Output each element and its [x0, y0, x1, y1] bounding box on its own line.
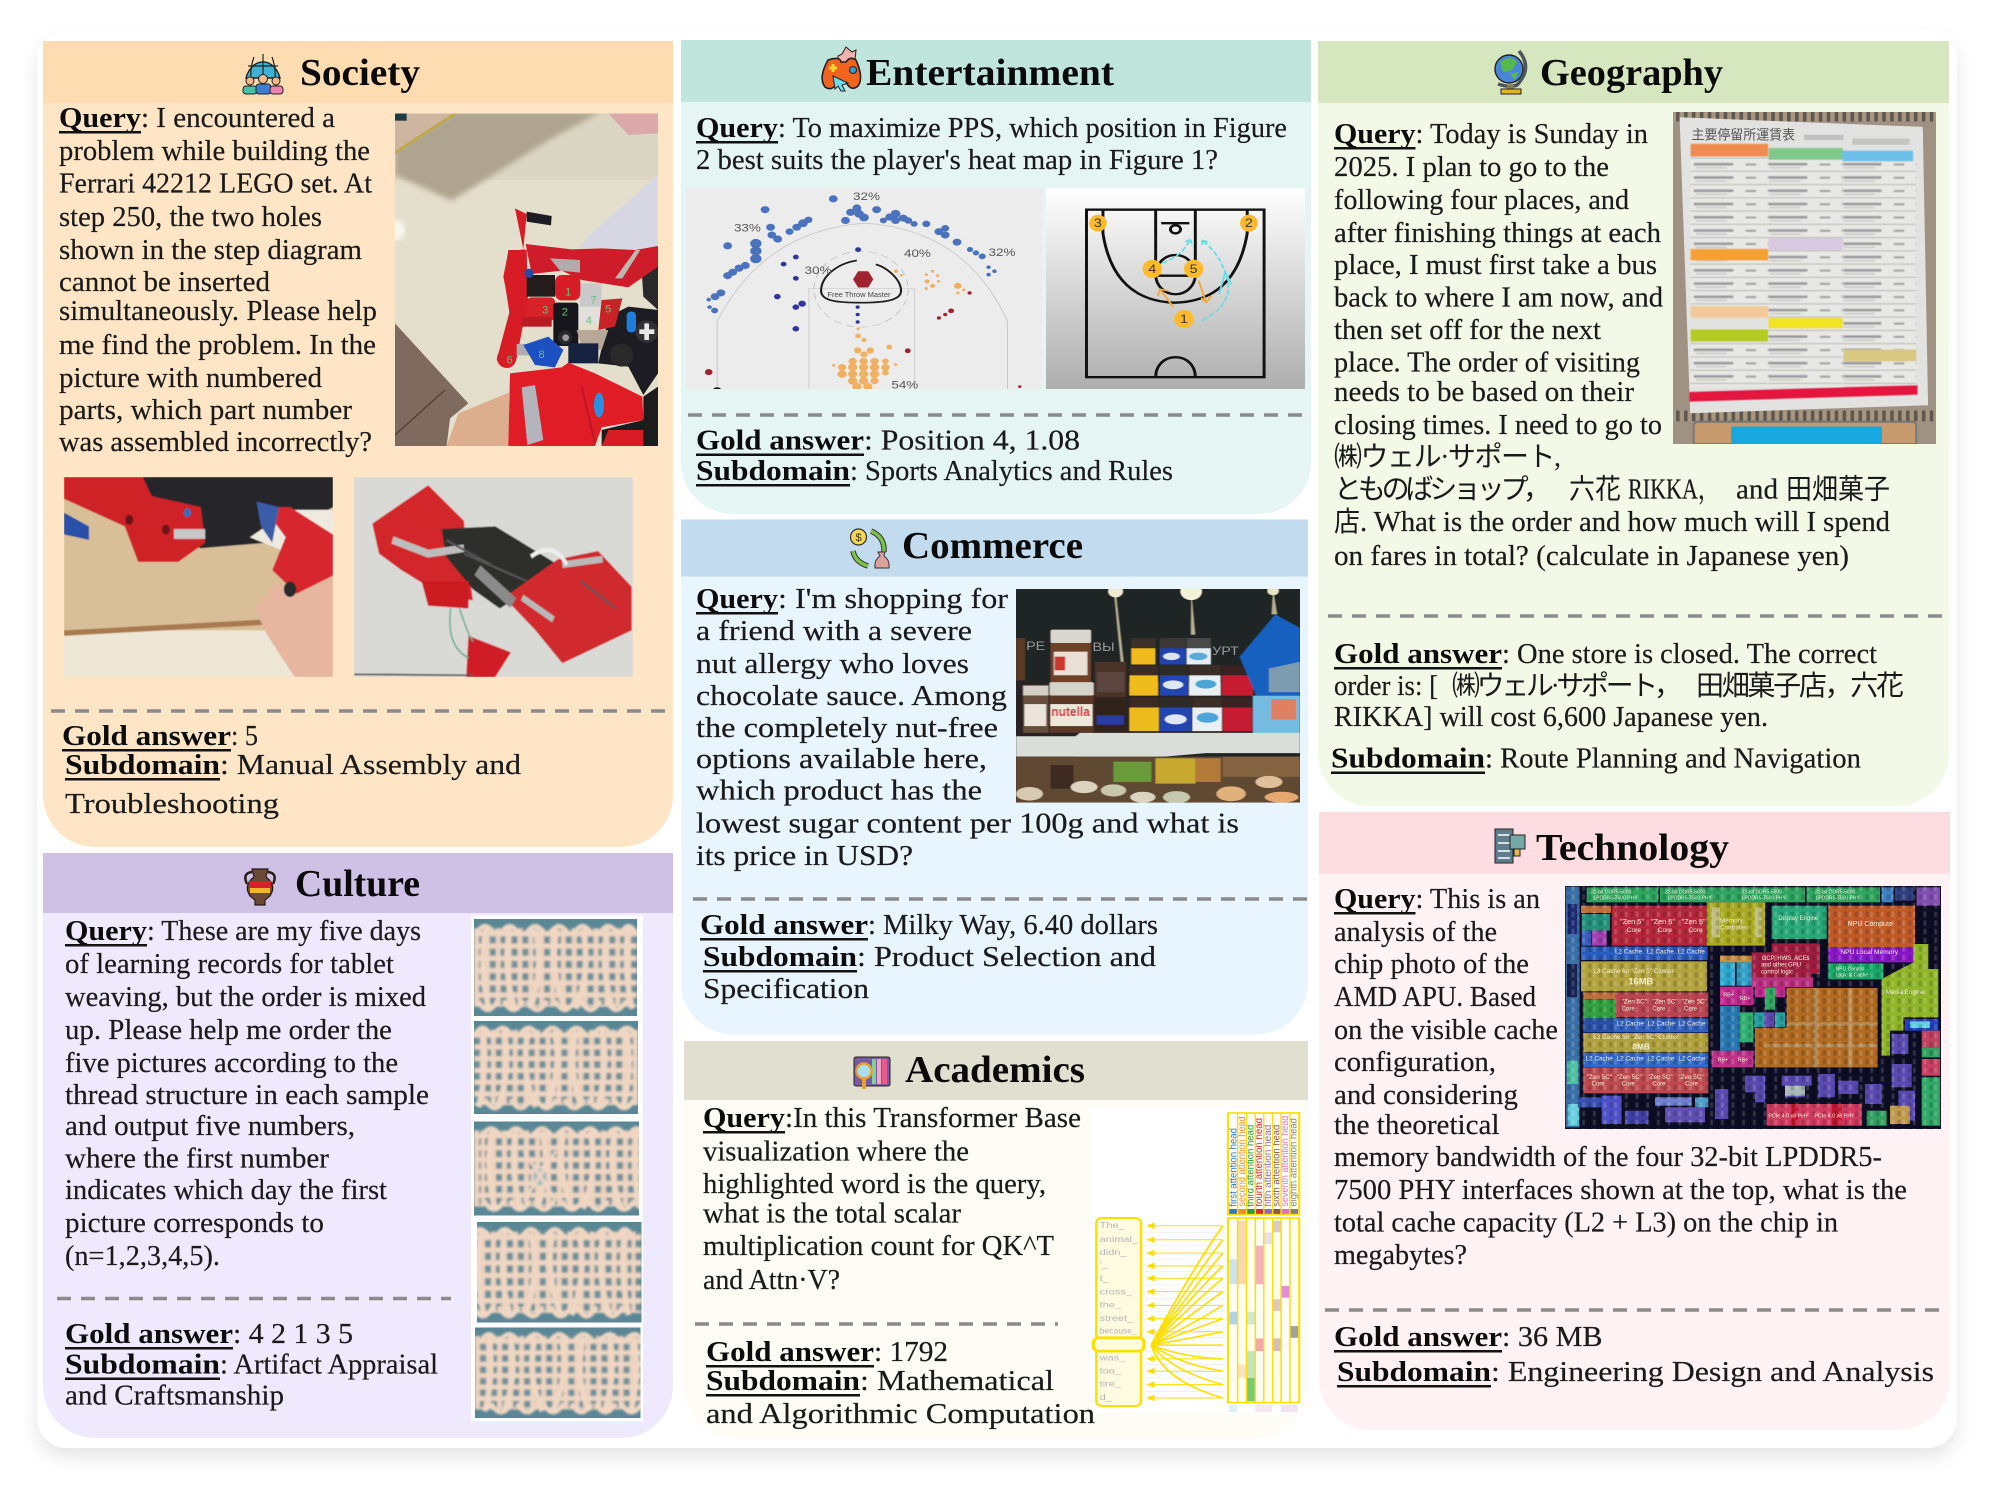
photo: bus fare table: 主要停留所運賃表	[1692, 123, 1795, 144]
query text: 六花	[1569, 474, 1621, 506]
query text	[1334, 119, 1890, 572]
query text: the theoretical	[1334, 1110, 1500, 1141]
diagram: attention visualization: second attention head	[1236, 1116, 1247, 1207]
diagram: attention visualization: first attention head	[1227, 1128, 1239, 1207]
query text: Query	[696, 584, 778, 615]
query text: chocolate sauce. Among	[696, 681, 1007, 712]
diagram: attention visualization: d_	[1100, 1393, 1112, 1403]
query text: nut allergy who loves	[696, 649, 969, 680]
query text: thread structure in each sample	[65, 1080, 429, 1111]
query text: lowest sugar content per 100g and what is	[696, 809, 1239, 840]
photo: AMD APU chip die: "Zen 5C"	[1682, 998, 1707, 1005]
photo: AMD APU chip die: Core	[1685, 1082, 1699, 1088]
gold answer and subdomain	[700, 910, 1158, 1005]
gold answer and subdomain: : 36 MB	[1502, 1322, 1602, 1353]
photo: numbered LEGO parts: 2	[562, 307, 568, 319]
photo: AMD APU chip die: Core	[1684, 1007, 1698, 1013]
query text: needs to be based on their	[1334, 377, 1635, 408]
query text: multiplication count for QK^T	[703, 1231, 1054, 1262]
query text: five pictures according to the	[65, 1048, 398, 1079]
gold answer and subdomain: Gold answer	[700, 910, 868, 941]
query text: :In this Transformer Base	[785, 1103, 1081, 1134]
query text: what is the total scalar	[703, 1199, 962, 1230]
gold answer and subdomain: : 5	[231, 721, 258, 752]
photo: AMD APU chip die: Logic & Cache	[1836, 973, 1868, 979]
photo: AMD APU chip die: 32-bit DDR5-5600	[1665, 889, 1706, 895]
photo: AMD APU chip die: RB+	[1718, 1057, 1728, 1063]
gold answer and subdomain: : Position 4, 1.08	[864, 426, 1080, 456]
heading: commerce: Commerce	[902, 525, 1083, 567]
gold answer and subdomain: Subdomain	[703, 942, 857, 973]
query text: AMD APU. Based	[1334, 982, 1536, 1013]
photo: numbered LEGO parts: 7	[590, 294, 597, 306]
photo: AMD APU chip die: Media Engine	[1886, 989, 1925, 996]
photo: AMD APU chip die: L2 Cache	[1647, 1056, 1675, 1063]
query text	[696, 113, 1287, 176]
gold answer and subdomain: 田畑菓子店，六花	[1696, 670, 1904, 702]
diagram: attention visualization: animal_	[1100, 1235, 1139, 1244]
photo: AMD APU chip die: "Zen 5C"	[1652, 998, 1678, 1005]
photo: chocolate spread shelf: УРТ	[1212, 644, 1239, 658]
gold answer and subdomain: and Algorithmic Computation	[706, 1399, 1095, 1430]
photo: AMD APU chip die: Core	[1652, 1007, 1666, 1013]
query text: : I'm shopping for	[778, 584, 1009, 615]
photo: AMD APU chip die: L2 Cache	[1615, 948, 1643, 955]
chart: basketball court positions	[1046, 188, 1305, 389]
photo: AMD APU chip die: LPDDR5-7500 PHY	[1668, 895, 1713, 901]
query text: simultaneously. Please help	[59, 296, 377, 327]
query text: following four places, and	[1334, 185, 1629, 216]
photo: AMD APU chip die: 16MB	[1628, 977, 1653, 987]
query text: parts, which part number	[59, 395, 353, 426]
query text: Query	[65, 916, 147, 947]
diagram: attention visualization: street_	[1100, 1314, 1134, 1324]
query text: 店	[1334, 507, 1360, 538]
heading: society: Society	[300, 52, 420, 94]
photo: AMD APU chip die: L2 Cache	[1678, 1021, 1706, 1028]
photo: AMD APU chip die: L2 Cache	[1617, 1021, 1644, 1028]
photo: AMD APU chip die: Core	[1658, 927, 1672, 934]
photo: AMD APU chip die: L2 Cache	[1678, 948, 1705, 955]
query text: place. The order of visiting	[1334, 348, 1640, 378]
query text: weaving, but the order is mixed	[65, 982, 426, 1013]
photo: woven sample 3	[474, 1122, 639, 1216]
query text: me find the problem. In the	[59, 330, 376, 361]
query text: the completely nut-free	[696, 713, 998, 744]
photo: AMD APU chip die: Core	[1622, 1007, 1635, 1013]
diagram: attention visualization: third attention head	[1245, 1125, 1256, 1207]
query text: where the first number	[65, 1144, 330, 1174]
query text: cannot be inserted	[59, 267, 270, 298]
gold answer and subdomain: : Route Planning and Navigation	[1485, 744, 1861, 774]
query text: step 250, the two holes	[59, 202, 322, 233]
photo: AMD APU chip die: "Zen 5"	[1682, 917, 1706, 926]
photo: AMD APU chip die: and other GPU	[1761, 963, 1801, 969]
photo: AMD APU chip die: "Zen 5"	[1651, 917, 1675, 926]
heading: entertainment: Entertainment	[866, 52, 1114, 94]
photo: AMD APU chip die: NPU Compute	[1848, 921, 1893, 928]
diagram: attention visualization: eighth attention head	[1288, 1118, 1299, 1207]
diagram: attention visualization	[1090, 1107, 1303, 1413]
gold answer and subdomain: Subdomain	[706, 1366, 860, 1397]
divider	[1325, 1308, 1940, 1312]
photo: AMD APU chip die: L3 Cache for "Zen 5" Cluster	[1593, 968, 1674, 975]
photo: woven sample 4	[477, 1222, 642, 1322]
gold answer and subdomain: Gold answer	[65, 1319, 233, 1350]
photo: woven sample 1	[474, 919, 637, 1016]
query text: back to where I am now, and	[1334, 282, 1663, 314]
photo: AMD APU chip die: PCIe 4.0 x8 PHY	[1768, 1113, 1809, 1119]
diagram: attention visualization: it_	[1100, 1340, 1112, 1350]
chart: basketball court positions: 1	[1180, 312, 1188, 326]
photo: AMD APU chip die: Core	[1622, 1082, 1635, 1088]
gold answer and subdomain	[706, 1337, 1095, 1430]
query text: RIKKA，	[1628, 475, 1720, 506]
query text: up. Please help me order the	[65, 1015, 392, 1046]
query text: . What is the order and how much will I spend	[1360, 507, 1890, 538]
chart: basketball court positions: 2	[1245, 217, 1253, 230]
divider	[57, 1297, 451, 1300]
query text: Query	[703, 1103, 785, 1134]
divider	[51, 709, 665, 713]
photo: AMD APU chip die: RB+	[1740, 996, 1751, 1002]
photo: woven sample 2	[474, 1021, 638, 1114]
query text: which product has the	[696, 776, 982, 806]
gold answer and subdomain: and Craftsmanship	[65, 1381, 284, 1412]
photo: AMD APU chip die: RB+	[1738, 1057, 1748, 1063]
photo: AMD APU chip die: "Zen 5"	[1620, 917, 1644, 926]
photo: AMD APU chip die: LPDDR5-7500 PHY	[1593, 895, 1638, 901]
gold answer and subdomain: : Sports Analytics and Rules	[850, 456, 1173, 487]
gold answer and subdomain: Subdomain	[1337, 1357, 1491, 1388]
photo: woven sample 5	[475, 1328, 641, 1418]
photo: AMD APU chip die: "Zen 5C"	[1647, 1074, 1673, 1081]
query text: 7500 PHY interfaces shown at the top, what is the	[1334, 1175, 1907, 1206]
query text: its price in USD?	[696, 841, 913, 872]
gold answer and subdomain: Subdomain	[1331, 744, 1485, 774]
diagram: attention visualization: was_	[1099, 1353, 1126, 1363]
query text: chip photo of the	[1334, 949, 1529, 980]
query text: analysis of the	[1334, 917, 1497, 948]
query text: : These are my five days	[147, 916, 421, 947]
query text: Query	[696, 113, 778, 144]
gold answer and subdomain	[1331, 639, 1904, 774]
query text: (n=1,2,3,4,5).	[65, 1241, 220, 1272]
query text	[1334, 884, 1907, 1271]
query text: : I encountered a	[141, 103, 335, 134]
photo: AMD APU chip die: 32-bit DDR5-5600	[1742, 889, 1782, 895]
gold answer and subdomain: : Artifact Appraisal	[220, 1350, 438, 1380]
query text: ㈱ウェル·サポート,	[1334, 441, 1561, 473]
query text: on fares in total? (calculate in Japanese yen)	[1334, 541, 1849, 572]
gold answer and subdomain: ㈱ウェル·サポート，	[1452, 670, 1682, 702]
panel: culture	[43, 853, 673, 1438]
photo: AMD APU chip die: L2 Cache	[1586, 1056, 1613, 1063]
query text: Query	[1334, 119, 1416, 150]
photo: AMD APU chip die: L2 Cache	[1617, 1056, 1644, 1063]
gold answer and subdomain: Gold answer	[706, 1337, 874, 1368]
image strip: five woven samples	[469, 916, 646, 1422]
photo: chocolate spread shelf: nutella	[1051, 705, 1091, 719]
diagram: attention visualization: too_	[1100, 1367, 1122, 1376]
query text: and	[1736, 475, 1778, 506]
photo: LEGO Ferrari model	[354, 477, 633, 677]
query text: closing times. I need to go to	[1334, 410, 1662, 441]
photo: numbered LEGO parts: 1	[565, 286, 571, 298]
query text: and output five numbers,	[65, 1111, 355, 1142]
panel: technology	[1319, 812, 1950, 1430]
query text: indicates which day the first	[65, 1175, 387, 1206]
panel: society	[43, 41, 673, 847]
photo: AMD APU chip die: Core	[1652, 1082, 1666, 1088]
chart: basketball court positions: 5	[1190, 262, 1198, 276]
gold answer and subdomain: Troubleshooting	[65, 789, 279, 820]
photo: AMD APU chip die: PCIe 4.0 x8 PHY	[1814, 1113, 1855, 1119]
query text: then set off for the next	[1334, 315, 1601, 346]
chart: shot heat map: Free Throw Master	[827, 290, 891, 299]
photo: numbered LEGO parts: 6	[506, 354, 513, 366]
diagram: attention visualization: because_	[1100, 1327, 1137, 1336]
icon: game controller	[822, 47, 861, 91]
chart: shot heat map: 40%	[904, 247, 931, 260]
gold answer and subdomain: : 4 2 1 3 5	[233, 1319, 353, 1350]
photo: numbered LEGO parts: 3	[542, 304, 548, 316]
photo: AMD APU chip die: "Zen 5C"	[1617, 1074, 1642, 1081]
photo: AMD APU chip die: Memory	[1720, 918, 1744, 925]
gold answer and subdomain: Subdomain	[65, 1350, 220, 1380]
photo: AMD APU chip die: "Zen 5C"	[1587, 1074, 1612, 1081]
photo: numbered LEGO parts: 4	[586, 315, 592, 327]
gold answer and subdomain: Subdomain	[696, 456, 850, 487]
query text: a friend with a severe	[696, 616, 972, 647]
photo: AMD APU chip die: LPDDR5-7500 PHY	[1742, 895, 1787, 901]
panel: entertainment	[681, 40, 1311, 514]
diagram: attention visualization: fourth attention head	[1253, 1118, 1264, 1207]
query text: memory bandwidth of the four 32-bit LPDDR5-	[1334, 1142, 1882, 1173]
gold answer and subdomain: Gold answer	[696, 426, 864, 456]
diagram: attention visualization: cross_	[1100, 1287, 1132, 1297]
divider	[688, 413, 1303, 417]
gold answer and subdomain	[696, 426, 1173, 487]
divider	[1328, 614, 1943, 618]
query text: options available here,	[696, 744, 987, 775]
icon: coin and exchange	[850, 529, 889, 568]
query text: picture corresponds to	[65, 1208, 324, 1239]
photo: AMD APU chip die: L2 Cache	[1648, 1021, 1675, 1028]
photo: AMD APU chip die: Display Engine	[1778, 916, 1819, 922]
panel: commerce	[681, 520, 1308, 1034]
query text: 田畑菓子	[1786, 474, 1890, 506]
photo: numbered LEGO parts: 8	[538, 349, 545, 361]
gold answer and subdomain: RIKKA] will cost 6,600 Japanese yen.	[1334, 702, 1768, 733]
divider	[693, 897, 1307, 901]
icon: server and monitor	[1495, 829, 1525, 863]
gold answer and subdomain: order is: [	[1334, 671, 1438, 702]
photo: numbered LEGO parts	[395, 114, 658, 446]
photo: AMD APU chip die: control logic	[1761, 969, 1793, 975]
query text	[59, 103, 377, 458]
query text: : This is an	[1416, 884, 1540, 915]
photo: LEGO assembly with hand	[64, 477, 333, 677]
gold answer and subdomain	[1334, 1322, 1934, 1388]
gold answer and subdomain: : 1792	[874, 1337, 948, 1368]
diagram: attention visualization: The_	[1100, 1221, 1125, 1231]
query text: 2025. I plan to go to the	[1334, 152, 1609, 183]
gold answer and subdomain: : Manual Assembly and	[220, 750, 521, 781]
gold answer and subdomain: : One store is closed. The correct	[1502, 639, 1877, 670]
diagram: attention visualization: the_	[1100, 1301, 1122, 1310]
gold answer and subdomain: Gold answer	[1334, 1322, 1502, 1353]
photo: AMD APU chip die: RB+	[1723, 993, 1734, 999]
photo: numbered LEGO parts: 5	[605, 304, 611, 316]
diagram: attention visualization: fifth attention head	[1262, 1125, 1273, 1207]
query text: とものばショップ，	[1334, 475, 1551, 506]
query text: after finishing things at each	[1334, 218, 1661, 249]
photo: chocolate spread shelf: ВЫ	[1092, 640, 1115, 654]
query text: configuration,	[1334, 1047, 1496, 1078]
gold answer and subdomain: Specification	[703, 974, 869, 1005]
query text: of learning records for tablet	[65, 949, 394, 980]
chart: shot heat map: 54%	[891, 379, 918, 391]
chart: basketball court positions: 4	[1148, 262, 1156, 276]
query text: problem while building the	[59, 136, 370, 167]
query text: picture with numbered	[59, 363, 322, 394]
photo: bus fare table	[1673, 112, 1936, 444]
photo: AMD APU chip die: Controller	[1720, 925, 1747, 932]
photo: AMD APU chip die: Core	[1592, 1082, 1605, 1088]
photo: chocolate spread shelf	[1016, 589, 1300, 803]
query text: megabytes?	[1334, 1240, 1467, 1271]
gold answer and subdomain	[62, 721, 521, 820]
divider	[695, 1322, 1058, 1326]
icon: book and magnifier	[854, 1057, 890, 1089]
diagram: attention visualization: t_	[1100, 1274, 1109, 1284]
photo: AMD APU chip die: Core	[1688, 927, 1703, 934]
diagram: attention visualization: seventh attention head	[1279, 1116, 1290, 1207]
photo: AMD APU chip die: L3 Cache for "Zen 5C" Cluster	[1593, 1034, 1678, 1041]
diagram: attention visualization: '_	[1100, 1260, 1108, 1270]
photo: AMD APU chip die: 32-bit DDR5-5600	[1591, 889, 1632, 895]
photo: AMD APU chip die: "Zen 5C"	[1678, 1074, 1704, 1081]
diagram: attention visualization: sixth attention head	[1271, 1125, 1282, 1207]
query text: : To maximize PPS, which position in Figure	[778, 113, 1287, 144]
chart: shot heat map: 30%	[805, 264, 832, 277]
photo: AMD APU chip die: 8MB	[1632, 1042, 1650, 1052]
gold answer and subdomain: Gold answer	[62, 721, 231, 752]
photo: AMD APU chip die: GCP, HWS, ACEs	[1762, 956, 1810, 962]
photo: AMD APU chip die: LPDDR5-7500 PHY	[1816, 895, 1861, 901]
query text	[65, 916, 429, 1272]
chart: shot heat map: 32%	[853, 190, 880, 203]
panel: academics	[684, 1041, 1308, 1438]
chart: basketball court positions: 3	[1094, 217, 1102, 230]
query text	[703, 1103, 1081, 1296]
chart: shot heat map: 33%	[734, 222, 761, 234]
chart: shot heat map: 32%	[989, 246, 1016, 259]
heading: academics: Academics	[905, 1049, 1085, 1091]
query text: : Today is Sunday in	[1416, 119, 1648, 150]
query text: total cache capacity (L2 + L3) on the chip in	[1334, 1208, 1838, 1238]
gold answer and subdomain: : Mathematical	[860, 1366, 1054, 1397]
icon: vase	[245, 869, 275, 905]
photo: AMD APU chip die: "Zen 5C"	[1622, 998, 1647, 1005]
icon: desk globe	[1495, 51, 1526, 94]
query text: on the visible cache	[1334, 1015, 1558, 1046]
heading: technology: Technology	[1536, 827, 1729, 869]
query text: shown in the step diagram	[59, 235, 362, 266]
photo: AMD APU chip die	[1565, 886, 1941, 1129]
heading: culture: Culture	[295, 863, 420, 905]
heading: geography: Geography	[1540, 52, 1723, 94]
icon: coin and exchange: $	[856, 532, 862, 544]
query text: Ferrari 42212 LEGO set. At	[59, 168, 372, 200]
photo: AMD APU chip die: NPU Local Memory	[1840, 949, 1899, 956]
query text	[696, 584, 1239, 872]
query text: highlighted word is the query,	[703, 1169, 1046, 1200]
gold answer and subdomain: Gold answer	[1334, 639, 1502, 670]
query text: Query	[1334, 884, 1416, 915]
gold answer and subdomain: : Product Selection and	[857, 942, 1156, 973]
gold answer and subdomain: : Milky Way, 6.40 dollars	[868, 910, 1158, 941]
gold answer and subdomain	[65, 1319, 438, 1412]
query text: 2 best suits the player's heat map in Figure 1?	[696, 145, 1218, 176]
gold answer and subdomain: : Engineering Design and Analysis	[1491, 1357, 1934, 1388]
photo: AMD APU chip die: Core	[1627, 927, 1641, 934]
icon: globe and people	[243, 54, 283, 94]
chart: shot heat map	[686, 188, 1042, 391]
diagram: attention visualization: didn_	[1100, 1248, 1127, 1257]
gold answer and subdomain: Subdomain	[65, 750, 220, 781]
query text: and considering	[1334, 1080, 1518, 1111]
photo: chocolate spread shelf: PE	[1026, 639, 1046, 653]
photo: AMD APU chip die: 32-bit DDR5-5600	[1815, 889, 1856, 895]
diagram: attention visualization: tire_	[1100, 1380, 1122, 1389]
photo: AMD APU chip die: L2 Cache	[1647, 948, 1674, 955]
query text: and Attn·V?	[703, 1265, 840, 1296]
photo: AMD APU chip die: NPU Central	[1836, 967, 1864, 973]
panel: geography	[1318, 41, 1949, 806]
query text: place, I must first take a bus	[1334, 250, 1657, 281]
query text: was assembled incorrectly?	[59, 427, 372, 458]
query text: Query	[59, 103, 141, 134]
query text: visualization where the	[703, 1137, 969, 1168]
photo: AMD APU chip die: L2 Cache	[1678, 1056, 1706, 1063]
